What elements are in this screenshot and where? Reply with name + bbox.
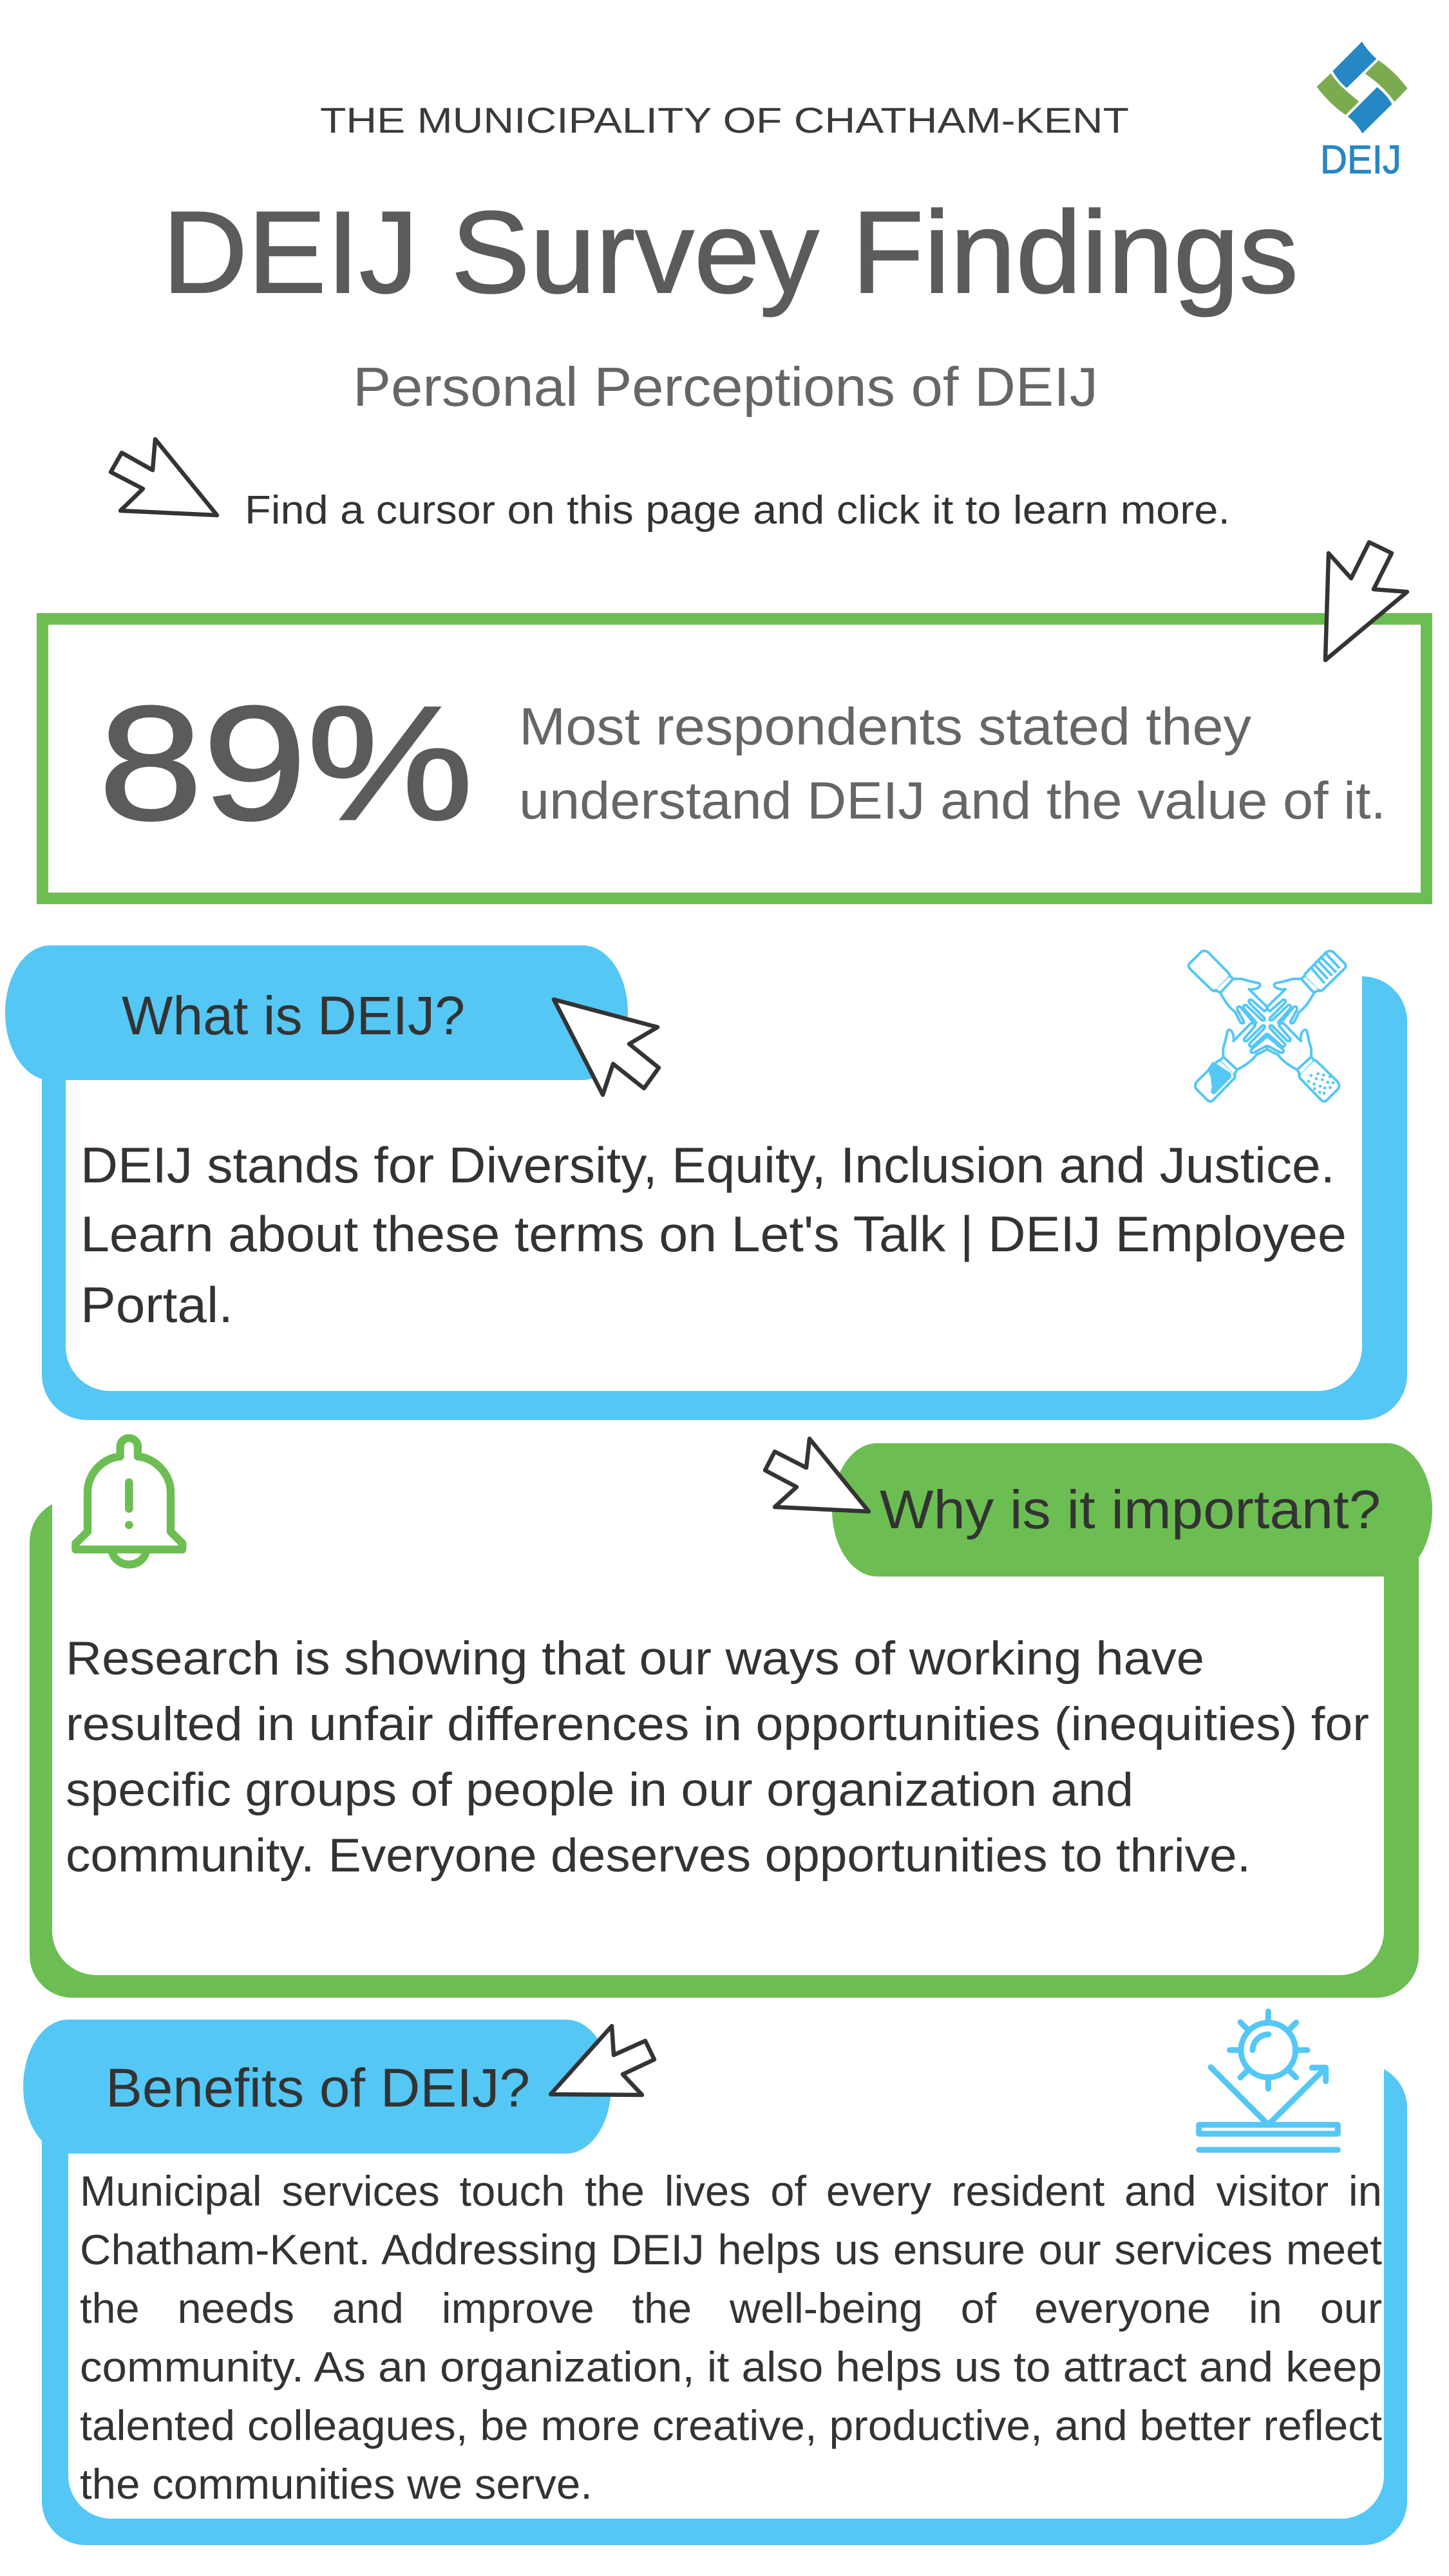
statistic description: understand DEIJ and the value of it. xyxy=(519,772,1386,830)
body text: talented colleagues, be more creative, productive, and better reflect xyxy=(80,2401,1382,2449)
body text xyxy=(80,1137,1347,1333)
body text xyxy=(80,2167,1382,2508)
body text: Research is showing that our ways of working have xyxy=(66,1633,1204,1685)
panel: Why is it important? xyxy=(30,1443,1432,1998)
body text: community. Everyone deserves opportunities to thrive. xyxy=(66,1830,1251,1882)
logo: DEIJ emblem: DEIJ xyxy=(1320,138,1401,182)
title: DEIJ Survey Findings xyxy=(162,187,1298,317)
instruction text: Find a cursor on this page and click it to learn more. xyxy=(245,488,1230,533)
statistic description: Most respondents stated they xyxy=(519,697,1251,756)
body text: Portal. xyxy=(80,1276,233,1333)
heading pill: Benefits of DEIJ? xyxy=(106,2058,530,2118)
subtitle: Personal Perceptions of DEIJ xyxy=(353,357,1098,418)
panel: 89% statistic xyxy=(43,619,1426,898)
body text: Municipal services touch the lives of every resident and visitor in xyxy=(80,2167,1382,2215)
icon: cursor on statistic box xyxy=(1325,542,1407,660)
icon: cursor on Why is it important? xyxy=(765,1439,869,1511)
heading pill: What is DEIJ? xyxy=(122,985,465,1046)
body text: the needs and improve the well-being of everyone in our xyxy=(80,2284,1382,2332)
heading pill xyxy=(5,945,628,1080)
heading pill xyxy=(23,2020,611,2154)
body text: Learn about these terms on Let's Talk | DEIJ Employee xyxy=(80,1206,1347,1262)
icon: cursor beside instruction xyxy=(111,439,217,515)
statistic description xyxy=(519,697,1386,830)
panel: Benefits of DEIJ? xyxy=(23,2020,1407,2545)
organisation name: THE MUNICIPALITY OF CHATHAM-KENT xyxy=(320,100,1129,140)
icon: cursor on What is DEIJ? xyxy=(554,999,659,1095)
icon: sun reflecting off surface xyxy=(1199,2011,1338,2150)
heading pill: Why is it important? xyxy=(880,1479,1381,1540)
icon: cursor on Benefits of DEIJ? xyxy=(551,2026,654,2095)
statistic value: 89% xyxy=(99,673,473,854)
body text: the communities we serve. xyxy=(80,2460,592,2508)
heading pill xyxy=(832,1443,1432,1577)
body text: resulted in unfair differences in opportunities (inequities) for xyxy=(66,1698,1369,1750)
body text: specific groups of people in our organization and xyxy=(66,1764,1133,1816)
icon: joined hands xyxy=(1189,951,1346,1101)
body text xyxy=(66,1633,1369,1882)
icon: alert bell xyxy=(75,1438,182,1564)
body text: DEIJ stands for Diversity, Equity, Inclusion and Justice. xyxy=(80,1137,1335,1193)
body text: Chatham-Kent. Addressing DEIJ helps us ensure our services meet xyxy=(80,2226,1382,2273)
body text: community. As an organization, it also helps us to attract and keep xyxy=(80,2343,1382,2391)
logo: DEIJ emblem xyxy=(1316,42,1408,182)
panel: What is DEIJ? xyxy=(5,945,1407,1420)
